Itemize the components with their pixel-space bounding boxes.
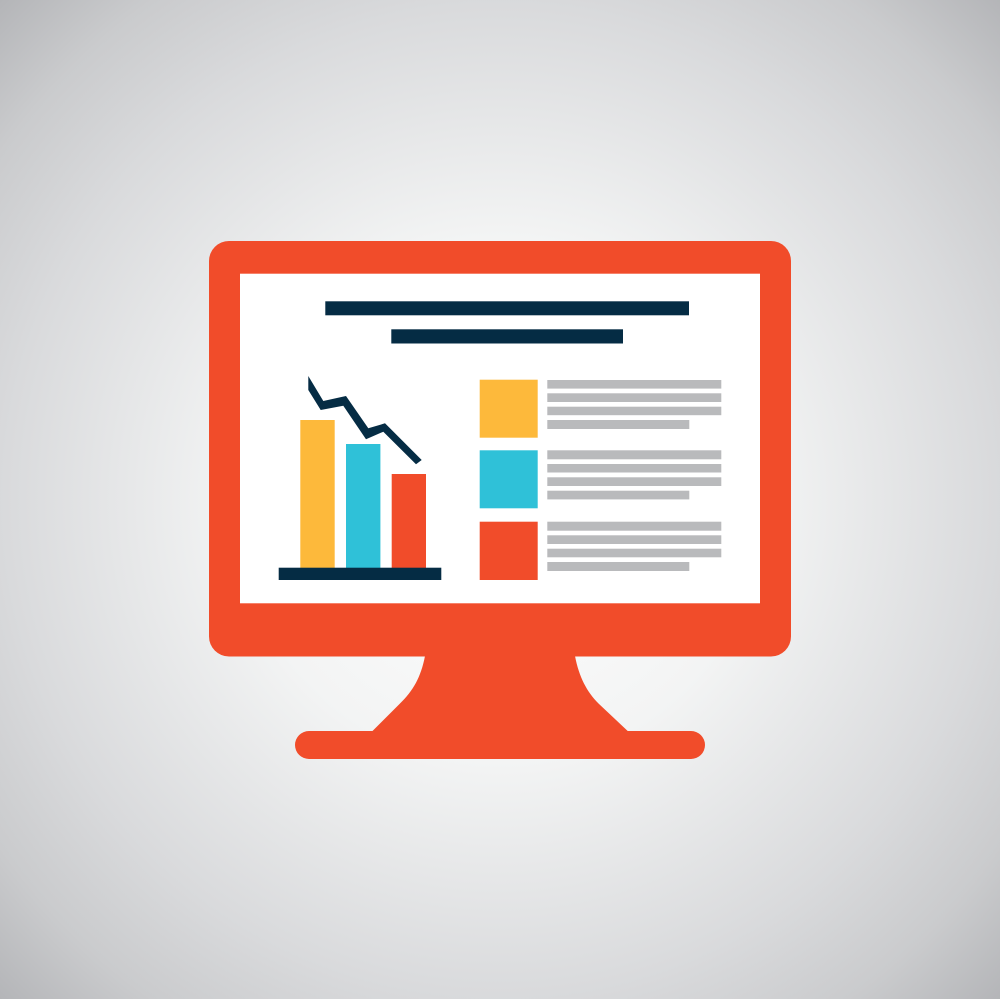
legend row 1 bbox=[480, 380, 721, 438]
monitor stand bbox=[295, 650, 705, 759]
screen bbox=[240, 274, 760, 603]
swatch: red bbox=[480, 522, 538, 580]
swatch: yellow bbox=[480, 380, 538, 438]
swatch: blue bbox=[480, 450, 538, 508]
heading line 1 bbox=[325, 301, 689, 315]
trend line arrow bbox=[308, 376, 422, 464]
text placeholder lines bbox=[547, 522, 721, 571]
bar: blue bbox=[346, 444, 380, 568]
bar: yellow bbox=[300, 420, 335, 568]
heading line 2 bbox=[391, 329, 623, 344]
legend row 3 bbox=[480, 522, 721, 580]
bar: red bbox=[392, 474, 426, 568]
text placeholder lines bbox=[547, 380, 721, 429]
chart baseline bbox=[279, 568, 441, 580]
bar chart bbox=[279, 376, 441, 580]
legend row 2 bbox=[480, 450, 721, 508]
monitor body bbox=[209, 241, 791, 656]
text placeholder lines bbox=[547, 450, 721, 499]
